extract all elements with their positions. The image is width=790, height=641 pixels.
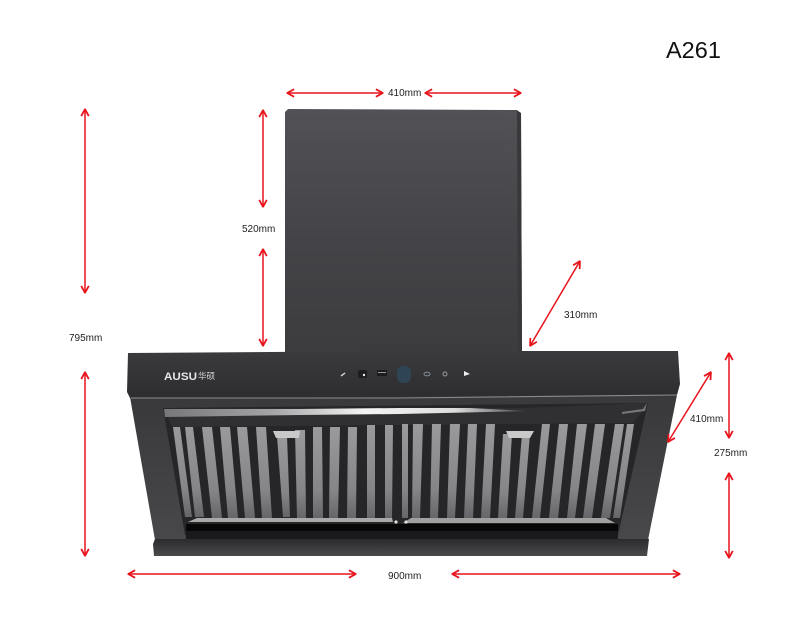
arrow: chimney depth [530, 261, 580, 346]
arrow: total height [84, 109, 86, 556]
arrow: total width [128, 573, 680, 575]
control icons [341, 366, 470, 383]
dimension labels: 310mm [564, 310, 597, 321]
logo [164, 371, 216, 383]
logo: AUSU [164, 371, 197, 383]
shiny rail [164, 408, 528, 417]
baffles right [402, 424, 634, 518]
arrow: chimney height [262, 110, 264, 346]
lower filter rails [188, 518, 393, 522]
arrow: chimney width [287, 92, 521, 94]
recess [163, 403, 648, 535]
hood body [127, 351, 680, 556]
baffles left [173, 425, 393, 518]
dimension labels: 520mm [242, 224, 275, 235]
dimension labels: 410mm [388, 88, 421, 99]
dimension labels: 410mm [690, 414, 723, 425]
canopy lower housing [130, 395, 677, 540]
base strip [153, 539, 649, 556]
dimension arrows [85, 93, 729, 574]
dimension labels: 275mm [714, 448, 747, 459]
front control panel [127, 351, 680, 398]
dimension labels: 900mm [388, 571, 421, 582]
chimney [285, 109, 522, 352]
model label: A261 [666, 37, 721, 63]
right rail glint [622, 403, 647, 414]
panel edge highlight [131, 395, 677, 398]
arrow: canopy depth [668, 372, 711, 442]
dimension labels [69, 88, 747, 582]
arrow: canopy height [728, 353, 730, 558]
logo: 华硕 [198, 371, 216, 381]
center filter clips [273, 431, 300, 438]
dimension labels: 795mm [69, 333, 102, 344]
upper trim [164, 403, 648, 427]
